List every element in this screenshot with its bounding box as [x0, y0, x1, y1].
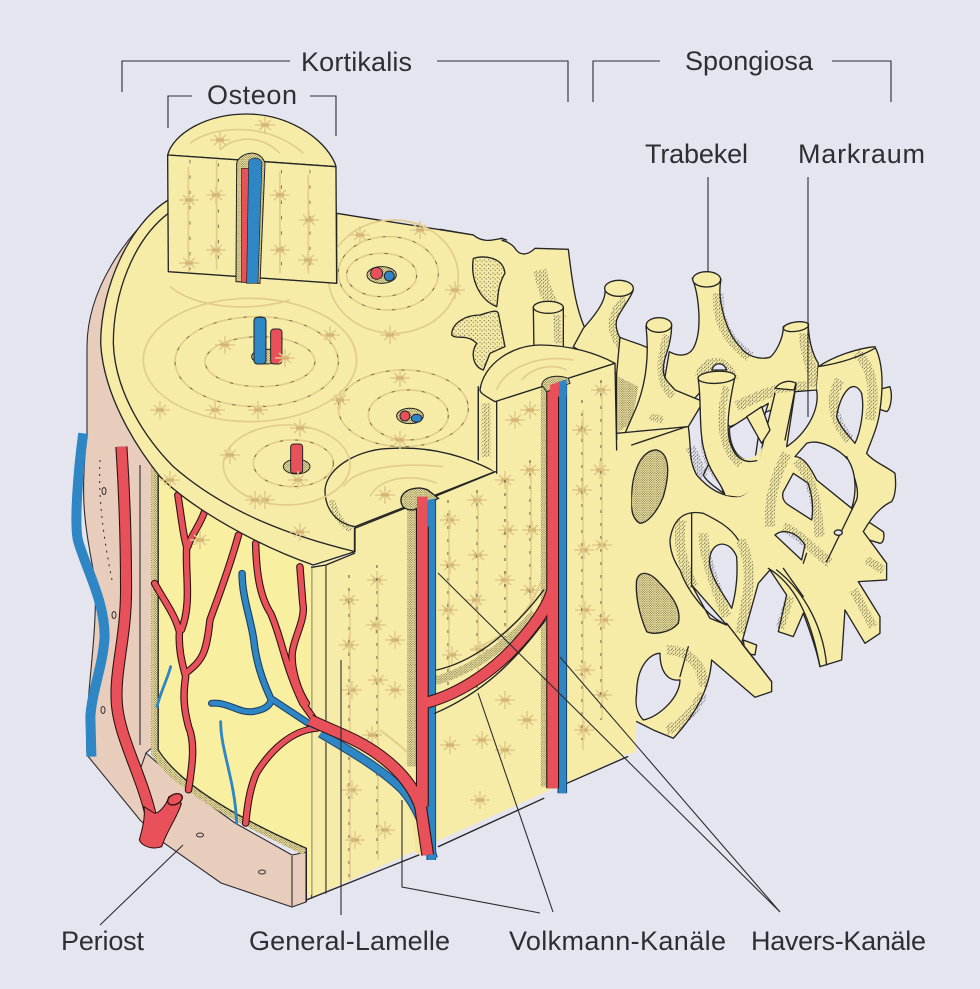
- central vessel sheaths and trunks: [310, 385, 562, 860]
- leader lines: [100, 61, 891, 925]
- big trabecula trunks: [663, 272, 818, 427]
- top cross-section surface with osteons: [101, 114, 507, 565]
- rear osteon dome, lobes and canal opening: [452, 257, 617, 473]
- corner strip general lamella: [312, 565, 326, 898]
- lower front osteon dome: [325, 448, 495, 530]
- branch tube top left: [573, 280, 648, 435]
- marrow holes: [636, 387, 863, 720]
- back struts on the right: [743, 387, 891, 655]
- cortex bottom edge: [306, 757, 628, 900]
- osteon: single artery: [283, 444, 310, 474]
- spongiosa: trabecular bone network: [440, 229, 896, 753]
- branch tube middle: [625, 318, 703, 433]
- back rough bone edge: [440, 229, 585, 373]
- osteon: canal with vessels middle right: [397, 408, 423, 424]
- canal opening with vessels: [542, 376, 570, 397]
- cortical bone block: [306, 363, 631, 900]
- front tubes: [698, 370, 796, 497]
- osteon: paired vessels standing: [252, 317, 282, 364]
- left artery: [116, 447, 184, 848]
- label: General-Lamelle: General-Lamelle: [249, 926, 450, 956]
- label: Havers-Kanäle: Havers-Kanäle: [751, 926, 926, 956]
- label: Volkmann-Kanäle: Volkmann-Kanäle: [509, 926, 726, 956]
- label: Kortikalis: Kortikalis: [301, 47, 412, 77]
- lower right canal edge: [435, 590, 546, 713]
- lamellae rings: [143, 220, 468, 505]
- star marks on surface: [150, 221, 465, 549]
- vessel tree: red arteries: [155, 495, 317, 823]
- label: Trabekel: Trabekel: [645, 139, 748, 169]
- stippled lobes at bone edge: [452, 257, 505, 370]
- label: Osteon: Osteon: [207, 80, 297, 110]
- haversian lamellae marks on cortical front: [338, 380, 614, 880]
- main web of trabeculae: [440, 347, 896, 753]
- osteon: canal with vessels top right: [367, 267, 396, 283]
- inner face of the bone with vessels: [76, 385, 562, 902]
- label: Periost: Periost: [61, 926, 144, 956]
- cut out osteon block: [168, 114, 337, 283]
- periosteum pink layer: [84, 200, 306, 907]
- lower front dome edge and canal opening: [312, 472, 496, 567]
- stippled cavities: [631, 353, 873, 730]
- label: Markraum: Markraum: [798, 139, 925, 169]
- left vein: [76, 433, 105, 757]
- label: Spongiosa: Spongiosa: [685, 46, 814, 76]
